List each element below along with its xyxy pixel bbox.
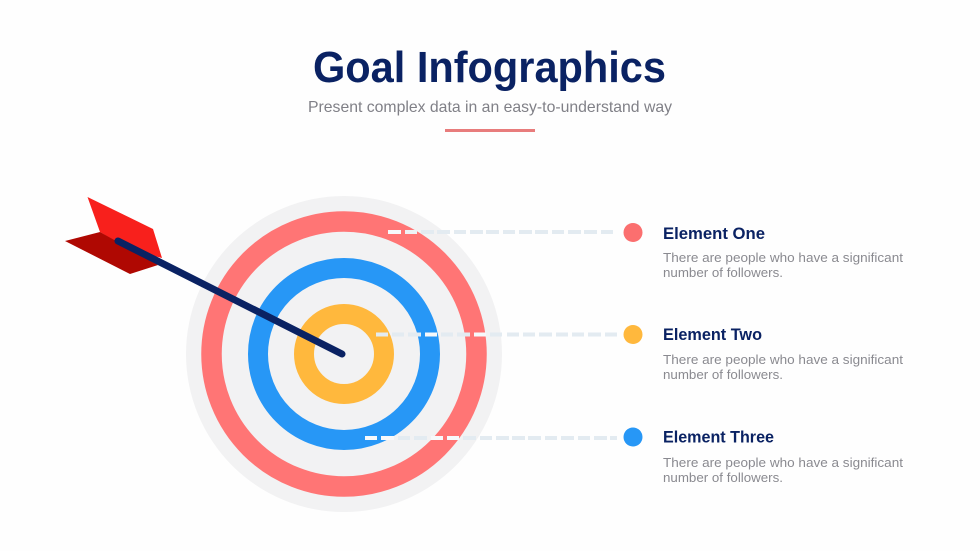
text block: element one: There are people who have a significant: [663, 250, 903, 265]
text block: element two: number of followers.: [663, 367, 783, 382]
text block: element three: number of followers.: [663, 470, 783, 485]
marker: element one: [624, 223, 642, 242]
text block: element three: Element Three: [663, 428, 774, 446]
target: [186, 196, 502, 512]
text block: element one: number of followers.: [663, 265, 783, 280]
text block: element two: There are people who have a significant: [663, 352, 903, 367]
connector line: element two: [376, 332, 617, 336]
title underline: [445, 129, 535, 132]
connector line: element one: [388, 230, 613, 234]
connector line: element three: [365, 436, 617, 440]
text block: element two: [663, 325, 903, 382]
text block: element one: Element One: [663, 224, 765, 243]
text block: element three: There are people who have a significant: [663, 455, 903, 470]
text block: element two: Element Two: [663, 325, 762, 344]
text block: element one: [663, 224, 903, 280]
marker: element two: [624, 325, 642, 344]
text block: element three: [663, 428, 903, 485]
title: Goal Infographics: [313, 43, 666, 92]
arrow: [65, 197, 342, 354]
marker: element three: [624, 428, 642, 446]
subtitle: Present complex data in an easy-to-understand way: [308, 99, 672, 116]
